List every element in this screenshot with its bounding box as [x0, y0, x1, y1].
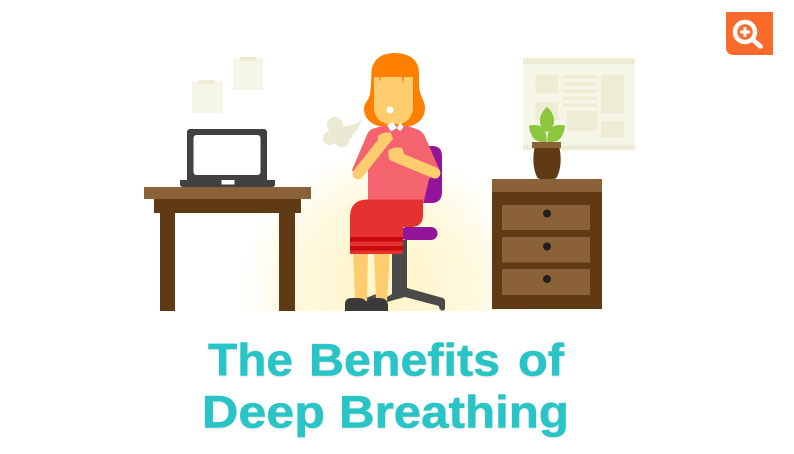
office chair [366, 146, 445, 311]
collar [387, 122, 404, 132]
breath cloud [323, 117, 362, 148]
title [202, 334, 569, 438]
forearm left [358, 141, 384, 174]
title: Breathing [339, 386, 569, 438]
shirt [352, 126, 440, 205]
shoes [345, 298, 367, 311]
sticky notes [192, 57, 263, 113]
forearm right [394, 156, 435, 173]
title: Deep [202, 386, 325, 438]
hair [364, 53, 425, 126]
title: The [208, 334, 293, 386]
wall poster [523, 58, 635, 150]
cabinet [492, 179, 602, 309]
legs [353, 250, 368, 301]
face [374, 77, 413, 124]
desk [144, 187, 311, 311]
skirt [350, 200, 423, 254]
title: Benefits [309, 334, 500, 386]
laptop [180, 129, 275, 187]
zoom button [726, 12, 773, 55]
background glow [235, 140, 535, 311]
plant in pot [529, 107, 565, 179]
mouth [386, 106, 394, 114]
person [345, 53, 440, 311]
title: of [518, 334, 565, 386]
